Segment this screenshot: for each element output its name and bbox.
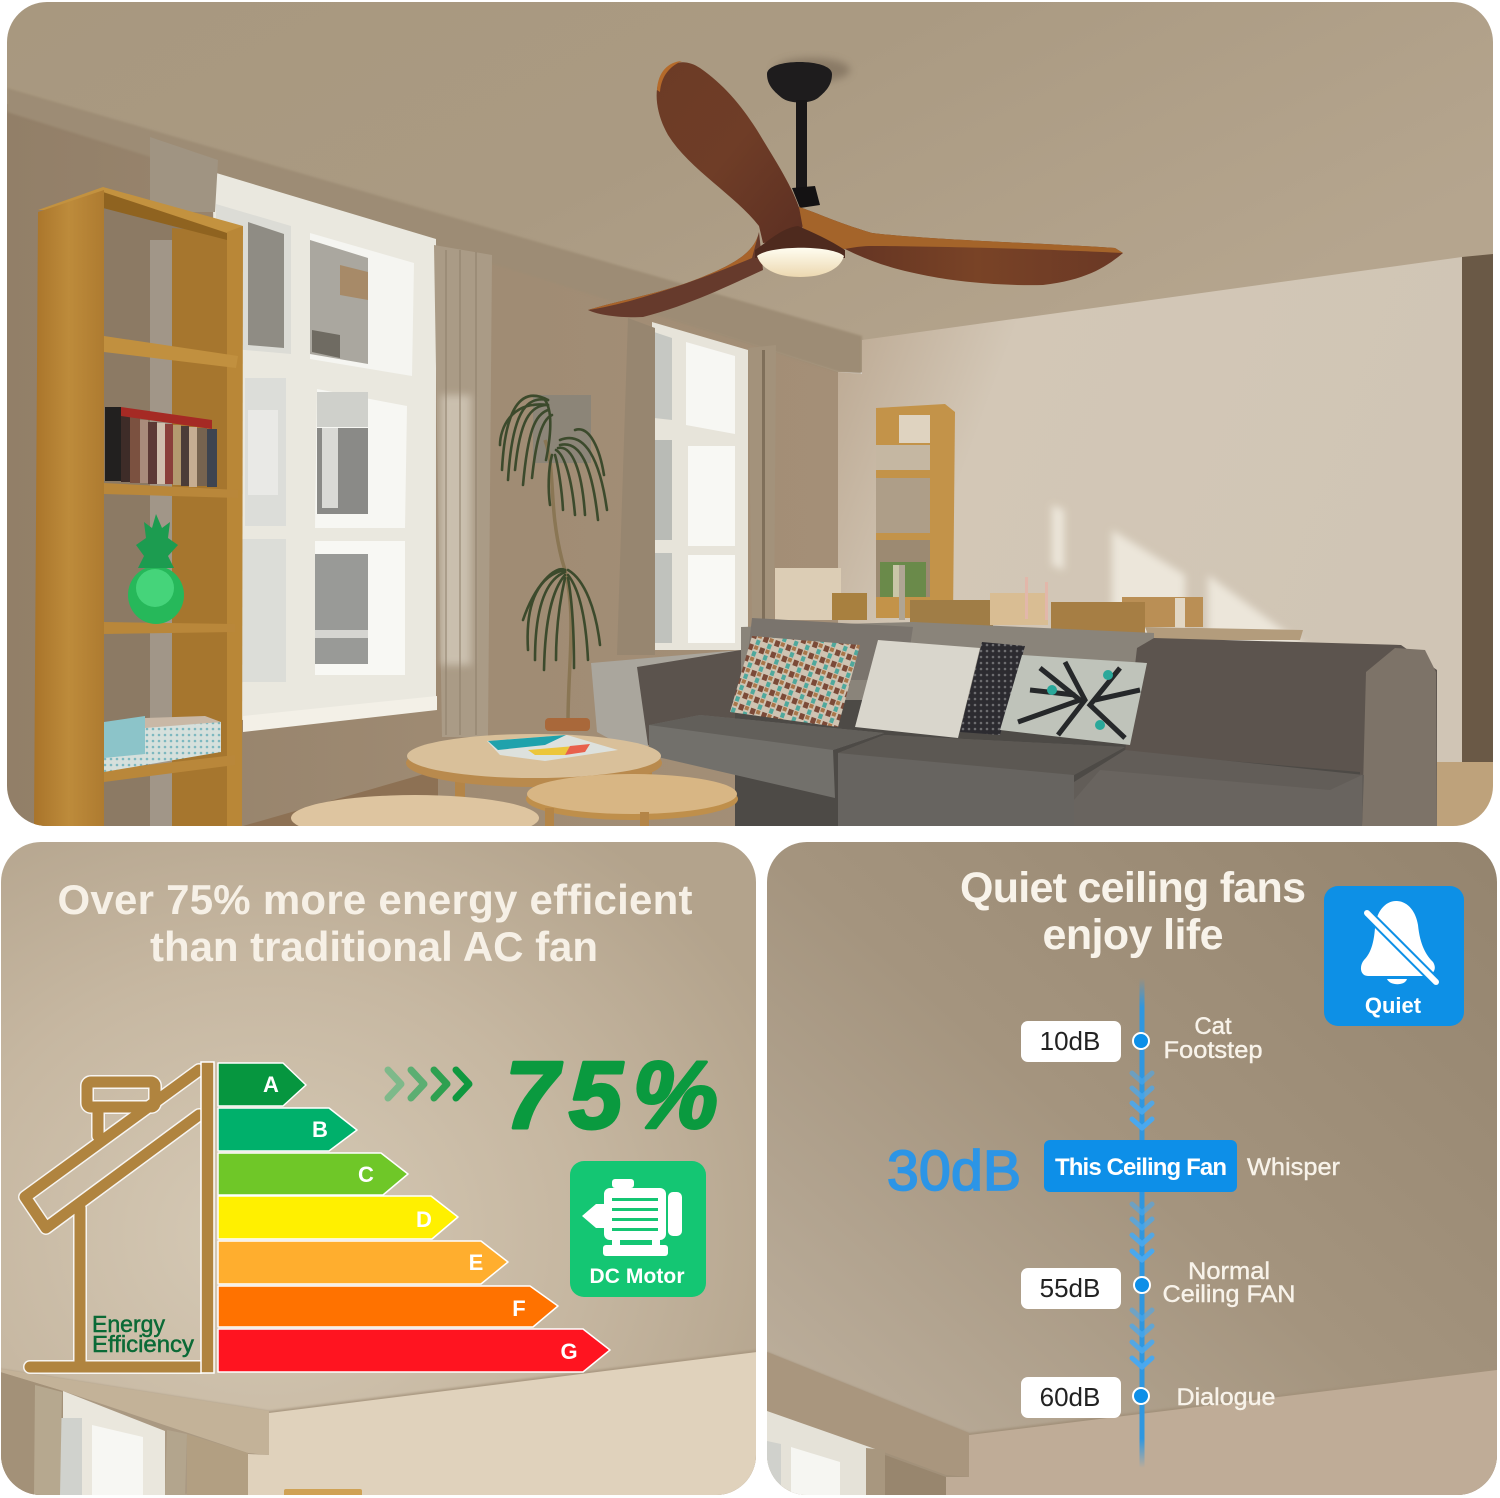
- bar D: [218, 1196, 458, 1239]
- sofa right side: [1125, 638, 1437, 826]
- bar letters: [263, 1072, 578, 1364]
- window right: [652, 322, 748, 650]
- sofa: [591, 618, 1437, 826]
- sunlight on wall: [1049, 504, 1304, 642]
- panel: energy efficiency: [0, 842, 757, 1498]
- heading: Quiet ceiling fans: [960, 864, 1306, 912]
- bookshelf left: [34, 187, 243, 830]
- badge: Quiet: [1324, 886, 1464, 1026]
- bar A: [218, 1063, 306, 1106]
- house icon: [25, 1062, 214, 1373]
- panel: quiet operation: [767, 842, 1497, 1497]
- bar E: [218, 1241, 508, 1284]
- tray: [487, 735, 618, 761]
- bar letters: G: [560, 1339, 578, 1364]
- level: this ceiling fan 30dB: [887, 1139, 1340, 1203]
- bar letters: B: [312, 1117, 328, 1142]
- level: 55dB: Normal: [1188, 1258, 1270, 1285]
- level: 10dB: Footstep: [1164, 1037, 1262, 1064]
- left wall: [7, 104, 838, 826]
- level: 60dB: Dialogue: [1176, 1384, 1276, 1411]
- plant: [500, 395, 607, 731]
- bar C: [218, 1153, 408, 1195]
- level: 55dB: [1021, 1258, 1296, 1309]
- downward chevrons: [1132, 1073, 1152, 1367]
- heading: [59, 884, 692, 962]
- curtains: [140, 137, 776, 830]
- box: [104, 716, 221, 772]
- sofa back: [741, 622, 1154, 700]
- background room: [0, 1350, 757, 1498]
- blade: lower left: [588, 232, 763, 317]
- energy efficiency label: [94, 1316, 194, 1358]
- fan mount: [767, 58, 850, 208]
- bar B: [218, 1108, 357, 1151]
- bar G: [218, 1329, 610, 1372]
- bar letters: D: [416, 1207, 432, 1232]
- bar letters: A: [263, 1072, 279, 1097]
- level: 60dB: 60dB: [1040, 1382, 1100, 1412]
- ceiling soffit: [7, 88, 862, 374]
- back bookshelf, radiator and dining set: [775, 404, 1303, 640]
- right dark wall: [1462, 254, 1493, 765]
- cushion: palm: [1000, 655, 1147, 745]
- 75%: 75%: [505, 1042, 718, 1149]
- coffee tables: [291, 734, 738, 826]
- heading: than traditional AC fan: [150, 923, 598, 970]
- badge: DC Motor: [570, 1161, 706, 1297]
- level: 10dB: Cat: [1194, 1013, 1232, 1040]
- arrows: [388, 1070, 469, 1098]
- LED light: [757, 248, 844, 277]
- rating bars A to G: [218, 1063, 610, 1372]
- level: 55dB: 55dB: [1040, 1273, 1100, 1303]
- level: 55dB: Ceiling FAN: [1162, 1281, 1296, 1308]
- badge label: Quiet: [1365, 993, 1422, 1018]
- level: 10dB: 10dB: [1040, 1026, 1100, 1056]
- blade: right: [799, 207, 1123, 285]
- background room: [767, 1352, 1497, 1497]
- panel background: [767, 842, 1497, 1495]
- level: 60dB: [1021, 1377, 1276, 1418]
- ceiling: [7, 2, 1493, 372]
- pineapple lamp: [128, 514, 184, 624]
- panel background: [1, 842, 756, 1495]
- fan hub: [755, 226, 845, 258]
- bar letters: E: [469, 1250, 483, 1275]
- icon: muted bell: [1361, 901, 1436, 984]
- level: this ceiling fan 30dB: This Ceiling Fan: [1055, 1154, 1227, 1181]
- cushion: dark: [960, 642, 1025, 735]
- window left: [213, 172, 437, 732]
- level: this ceiling fan 30dB: Whisper: [1247, 1154, 1340, 1181]
- sofa seats: [649, 715, 884, 798]
- blade: upper: [657, 62, 803, 243]
- level: this ceiling fan 30dB: 30dB: [887, 1139, 1021, 1203]
- icon: motor: [582, 1179, 682, 1256]
- noise scale line: [1140, 978, 1144, 1468]
- panel: room photo with ceiling fan: [7, 2, 1493, 841]
- floor: [1437, 762, 1493, 826]
- books: [105, 407, 217, 487]
- cushion: white: [855, 640, 980, 738]
- bar letters: C: [358, 1162, 374, 1187]
- back wall: [838, 257, 1462, 770]
- heading: Over 75% more energy efficient: [58, 876, 692, 923]
- bar letters: F: [512, 1296, 526, 1321]
- heading: [960, 864, 1306, 959]
- cushion: colourful: [730, 636, 860, 727]
- badge label: DC Motor: [590, 1265, 684, 1288]
- energy efficiency label: Energy: [92, 1311, 166, 1337]
- energy efficiency label: Efficiency: [92, 1331, 195, 1357]
- ceiling fan: [588, 58, 1123, 317]
- level: 10dB: [1021, 1013, 1262, 1064]
- bar F: [218, 1286, 558, 1327]
- heading: enjoy life: [1042, 911, 1224, 959]
